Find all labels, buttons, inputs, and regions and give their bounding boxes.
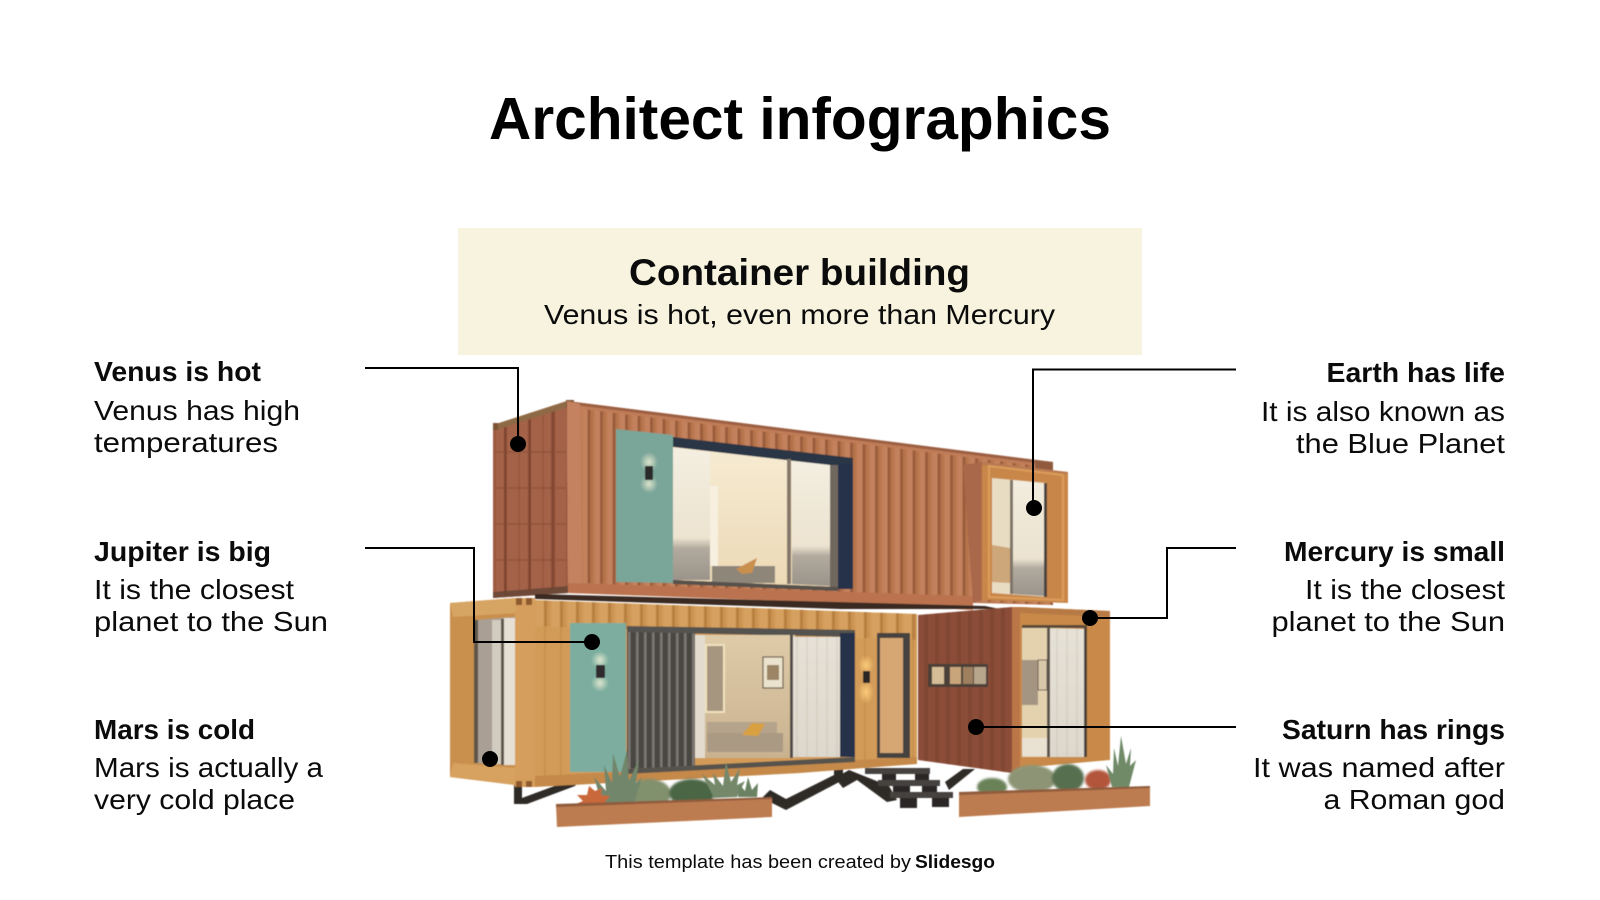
door (877, 633, 910, 758)
description: It is also known as (1261, 396, 1505, 427)
wall lamp (591, 651, 609, 692)
marker dot (584, 634, 600, 650)
sofa (707, 722, 783, 752)
description: Mars is actually a (94, 752, 323, 783)
slatted screen (627, 626, 855, 769)
large window (673, 437, 853, 591)
brown side wall (918, 607, 1012, 773)
left planter (556, 797, 772, 827)
panel: container building header (458, 228, 1142, 355)
panel heading: Container building (629, 252, 970, 293)
top container (493, 400, 1068, 610)
teal panel (616, 429, 673, 583)
leader line (1090, 548, 1236, 618)
footer credit: Slidesgo (915, 852, 995, 872)
corner post (515, 598, 535, 787)
pillow (736, 558, 757, 574)
right open end (1012, 607, 1110, 773)
callout: Earth has life (1026, 357, 1505, 516)
heading: Venus is hot (94, 356, 261, 387)
footer credit: This template has been created by (605, 852, 911, 872)
description: very cold place (94, 784, 295, 815)
description: It is the closest (94, 574, 294, 605)
top container door end (493, 400, 574, 598)
bottom container long wall (535, 600, 917, 787)
leader line (365, 548, 592, 642)
dark shadow gap (535, 594, 1000, 609)
callout: Venus is hot (94, 356, 526, 458)
description: It was named after (1253, 752, 1505, 783)
sofa (712, 566, 775, 583)
marker dot (1026, 500, 1042, 516)
corner castings (493, 400, 574, 430)
description: It is the closest (1305, 574, 1505, 605)
callout: Mercury is small (1082, 536, 1505, 637)
top container long wall (567, 401, 1053, 605)
teal panel (570, 623, 626, 772)
heading: Mars is cold (94, 714, 255, 745)
callout: Jupiter is big (94, 536, 600, 650)
steps (865, 768, 953, 808)
title: Architect infographics (489, 86, 1111, 152)
marker dot (510, 436, 526, 452)
marker dot (968, 719, 984, 735)
narrow window (928, 664, 988, 687)
description: planet to the Sun (94, 606, 328, 637)
bottom container (450, 598, 1110, 787)
left open end (450, 598, 515, 785)
living room window (627, 633, 855, 774)
top container base beam (568, 583, 973, 610)
leader line (976, 726, 1236, 728)
callout: Mars is cold (94, 714, 498, 815)
leader line (365, 368, 518, 444)
marker dot (1082, 610, 1098, 626)
description: Venus has high (94, 395, 300, 426)
wall lamp (640, 452, 658, 493)
marker dot (482, 751, 498, 767)
heading: Saturn has rings (1282, 714, 1505, 745)
panel subtitle: Venus is hot, even more than Mercury (544, 299, 1055, 330)
framed picture (763, 657, 783, 688)
glowing wall panel (706, 645, 724, 712)
wall lamp warm (858, 655, 874, 704)
description: planet to the Sun (1272, 606, 1505, 637)
left planter plants (569, 750, 758, 809)
heading: Earth has life (1326, 357, 1505, 388)
description: the Blue Planet (1296, 428, 1505, 459)
pillow (742, 723, 765, 736)
callout: Saturn has rings (968, 714, 1505, 815)
projecting window box (963, 462, 1068, 603)
heading: Jupiter is big (94, 536, 271, 567)
heading: Mercury is small (1284, 536, 1505, 567)
leader line (1033, 370, 1236, 508)
illustration: stacked container building (450, 400, 1150, 827)
support legs (514, 760, 975, 810)
description: a Roman god (1324, 784, 1505, 815)
description: temperatures (94, 427, 278, 458)
right planter plants (977, 736, 1136, 796)
right planter (959, 786, 1150, 817)
